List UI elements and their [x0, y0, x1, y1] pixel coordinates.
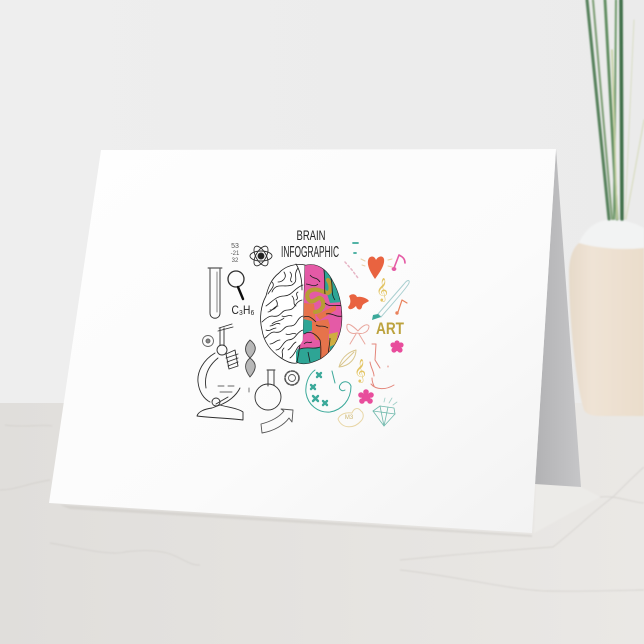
number stack: 53 [231, 243, 239, 250]
equation digits: -21 [231, 251, 240, 257]
card front [49, 149, 556, 533]
icon: test tube [208, 268, 222, 318]
icon: leaf [339, 350, 356, 367]
icon: atom [250, 244, 272, 268]
icon: music note orange [395, 300, 407, 315]
title [281, 227, 339, 261]
icon: palette [306, 370, 351, 412]
icon: small cog circle [202, 336, 214, 346]
teal lobes [296, 270, 340, 364]
left side: science doodles [197, 243, 299, 433]
formula: C₃H₆ [232, 303, 255, 317]
shadow under the card [60, 505, 532, 537]
wall background [0, 0, 644, 404]
icon: heart [361, 256, 392, 279]
icon: gold crown doodle [338, 409, 363, 427]
icon: treble clef: 𝄞 [376, 279, 388, 302]
icon: pink flower 2 [358, 389, 374, 404]
icon: music note pink [392, 255, 405, 271]
plant stems [587, 0, 644, 219]
brain: right hemisphere [296, 264, 342, 364]
light area beneath card fold [534, 484, 600, 533]
icon: pink flower [390, 340, 404, 353]
teal dots [353, 243, 358, 253]
icon: curved arrow [261, 409, 293, 433]
icon: paint splat [348, 294, 369, 310]
icon: microscope [197, 324, 249, 420]
icon: paint brush [372, 280, 409, 320]
icon: treble clef 2: 𝄞 [354, 360, 366, 383]
right side: art doodles [306, 243, 409, 427]
pink dotted stroke [345, 262, 358, 278]
icon: red guitar doodle [370, 344, 394, 389]
equation digits [231, 251, 240, 264]
marble table [0, 403, 644, 644]
icon: diamond [373, 398, 397, 426]
icon: flask [255, 370, 281, 410]
icon: dna helix [246, 340, 255, 377]
title: BRAIN [296, 227, 326, 243]
icon: ribbon bow [347, 324, 369, 344]
title: INFOGRAPHIC [281, 244, 339, 261]
brain wrinkles [297, 264, 342, 362]
small label: M3 [345, 415, 354, 421]
mustard lobes [307, 280, 331, 312]
ART label: ART [376, 319, 404, 338]
equation digits: 32 [232, 258, 239, 264]
vase [569, 220, 644, 416]
icon: magnifier [228, 271, 244, 299]
orange lobes [303, 303, 336, 362]
icon: gear [285, 371, 299, 385]
brain: left hemisphere [261, 264, 305, 363]
card back panel [535, 149, 581, 487]
